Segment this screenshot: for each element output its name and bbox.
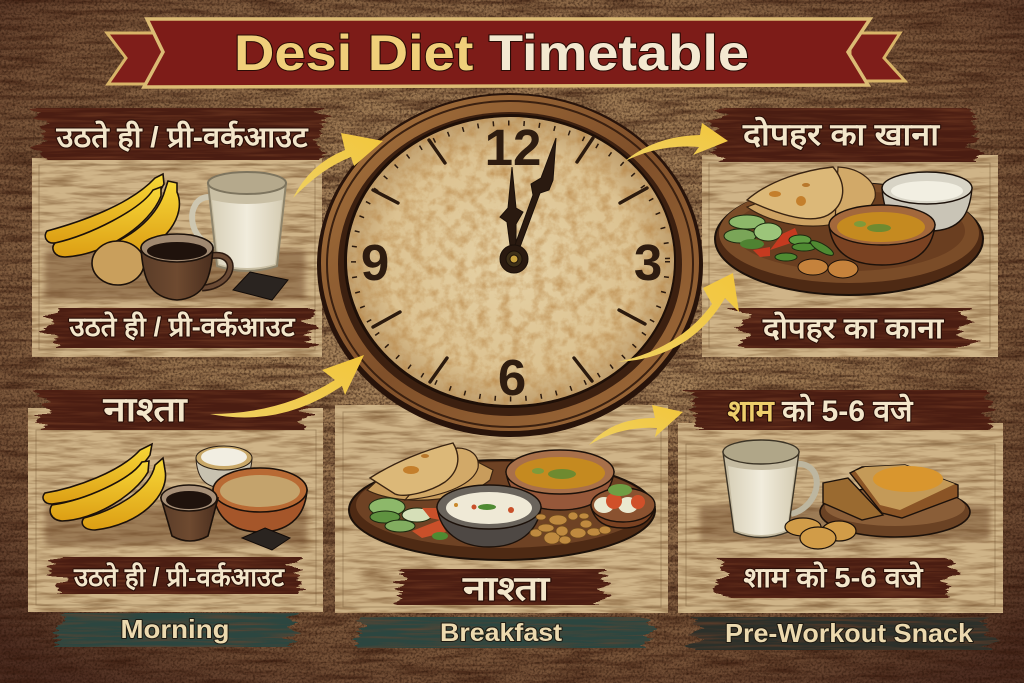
sub-caption ribbon: दोपहर का काना	[762, 311, 945, 345]
icon: curd bowl	[196, 446, 252, 488]
clock numerals: 9	[361, 234, 389, 291]
parchment card	[335, 405, 668, 613]
panel: breakfast	[335, 405, 668, 613]
thali: plate, roti, dal, salad, curd	[715, 167, 983, 295]
parchment card	[28, 408, 323, 612]
heading ribbon: दोपहर का खाना	[742, 116, 940, 152]
heading ribbon: नाश्ता	[462, 570, 550, 608]
icon: sachet	[242, 528, 290, 550]
icon: potato	[92, 241, 144, 285]
arrow: clock to lunch heading	[625, 123, 728, 161]
parchment card	[32, 158, 322, 357]
arrow: breakfast to snack	[589, 405, 683, 445]
panel: pre-workout snack	[678, 390, 1003, 613]
heading ribbon	[400, 569, 604, 608]
icon: bananas	[43, 444, 166, 530]
heading ribbon	[694, 390, 988, 430]
panel: lunch	[702, 108, 998, 357]
panel: morning nashta	[28, 390, 323, 612]
arrow: nashta to clock	[210, 355, 364, 418]
icon: sachet	[233, 272, 288, 300]
arrow: morning panel to clock	[293, 133, 383, 198]
clock hands	[500, 138, 556, 273]
sub-caption ribbon	[740, 308, 968, 348]
icon: toast on plate	[820, 465, 970, 537]
sub-caption ribbon	[720, 558, 950, 598]
icon: milk glass	[192, 172, 286, 271]
label: Breakfast: Breakfast	[440, 619, 563, 647]
label: Pre-Workout Snack: Pre-Workout Snack	[725, 618, 974, 648]
clock minor tick marks	[354, 123, 668, 399]
icon: tea cup	[161, 485, 218, 541]
table shadow	[45, 250, 305, 300]
icon: coffee mug	[141, 234, 230, 300]
clock face	[347, 117, 674, 405]
title banner	[107, 19, 905, 87]
label: Morning: Morning	[120, 614, 230, 644]
parchment card	[702, 155, 998, 357]
sub-caption ribbon	[52, 308, 310, 348]
clock numerals	[361, 119, 662, 406]
sub-caption ribbon: शाम को 5-6 वजे	[744, 561, 924, 593]
icon: grain bowl	[213, 468, 307, 532]
thali: plate, roti, dal, raita, salad	[349, 443, 655, 560]
label: Morning	[58, 613, 292, 647]
panel: wake up / pre-workout	[32, 108, 322, 357]
sub-caption ribbon: उठते ही / प्री-वर्कआउट	[68, 311, 296, 342]
table shadow	[700, 505, 990, 540]
heading ribbon: उठते ही / प्री-वर्कआउट	[55, 120, 309, 154]
clock numerals: 12	[485, 119, 541, 176]
banner ribbon tails	[107, 33, 905, 84]
heading ribbon: नाश्ता	[102, 391, 188, 429]
heading ribbon	[42, 108, 322, 160]
heading ribbon	[716, 108, 974, 162]
icon: nuts	[785, 518, 856, 549]
clock numerals: 6	[498, 349, 526, 406]
clock wooden rim	[317, 93, 703, 437]
icon: bananas	[45, 174, 179, 257]
icon: milk glass	[723, 440, 817, 538]
clock	[317, 93, 703, 437]
title text: Desi Diet Timetable	[234, 25, 749, 81]
clock hour ticks	[373, 138, 647, 382]
table shadow	[45, 505, 307, 545]
clock numerals: 3	[634, 234, 662, 291]
label: Breakfast	[354, 617, 646, 648]
parchment card	[678, 423, 1003, 613]
heading ribbon: शाम को 5-6 वजे	[728, 393, 914, 428]
banner main panel	[144, 19, 870, 87]
heading ribbon	[42, 390, 304, 430]
sub-caption ribbon: उठते ही / प्री-वर्कआउट	[73, 562, 285, 592]
arrow: clock to lunch panel	[618, 273, 739, 362]
